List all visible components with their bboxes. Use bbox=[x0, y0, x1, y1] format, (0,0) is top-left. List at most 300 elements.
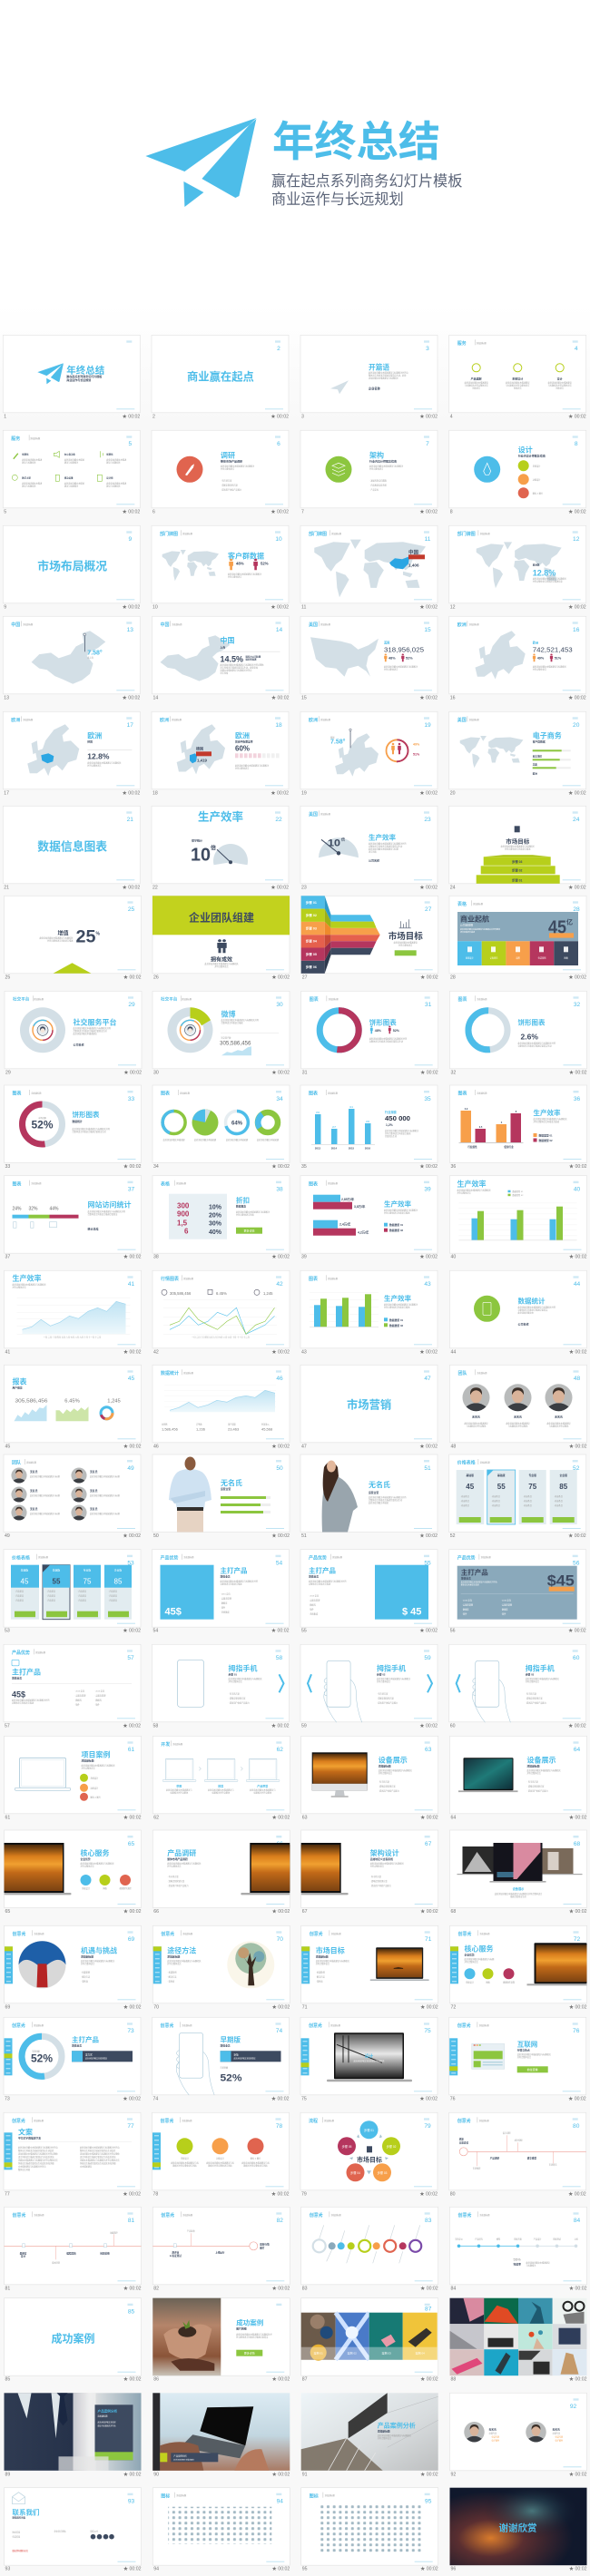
slide 75: bridge laptop: 添加副标题 bbox=[330, 2023, 341, 2027]
slide 91: building stairs photo: ★ 00:02 bbox=[420, 2472, 438, 2477]
slide 74: early version phone: 74 bbox=[276, 2028, 282, 2034]
slide 33: donut 52 percent: 市场份额 bbox=[38, 1116, 47, 1120]
slide 29: social platform wheel bbox=[5, 991, 142, 1075]
slide 94: icon sheet: 94 bbox=[277, 2498, 283, 2504]
slide 3: opening bbox=[300, 335, 438, 419]
slide 80: timeline start: 交流会议 bbox=[459, 2140, 468, 2144]
slide 50: man profile: 50 bbox=[153, 1533, 159, 1539]
slide 60: phone in hand final: ★ 00:02 bbox=[568, 1723, 586, 1729]
slide 84: progress line: 创意秀 bbox=[457, 2212, 472, 2218]
slide 19: europe ring: 德国 bbox=[330, 735, 334, 739]
slide 72: core service laptop: 此处添加详细文本描述建议与标题 bbox=[465, 1957, 495, 1961]
slide 36: grouped bars orange magenta: 36 bbox=[450, 1164, 456, 1170]
slide 53: pricing table blue: ★ 00:02 bbox=[123, 1629, 141, 1634]
slide 28: business launch panel: 电话营销 bbox=[538, 955, 546, 959]
slide 24: stacked steps: 步骤 01 bbox=[512, 877, 523, 882]
slide 36: grouped bars orange magenta: 图表 bbox=[457, 1091, 467, 1097]
slide 70: methods tree: 创意秀 bbox=[161, 1931, 174, 1937]
slide 62: development three laptops: 开发 bbox=[161, 1741, 170, 1748]
slide 18: germany coverage: 1,419 bbox=[197, 758, 208, 762]
slide 69: opportunities and challenges: · 解决方法 bbox=[81, 1974, 91, 1978]
slide 36: grouped bars orange magenta: 此处添加详细文本描述建议与标题相关 bbox=[534, 1117, 567, 1121]
slide 70: methods tree: 添加副标题 bbox=[167, 1954, 180, 1958]
slide 49: six team members: 无名氏 bbox=[90, 1470, 98, 1474]
slide 13: china pin: 北上海 bbox=[87, 655, 94, 659]
slide 22: gauge productivity: 22 bbox=[152, 885, 158, 890]
slide 16: europe statistic: 欧洲 bbox=[457, 622, 467, 628]
slide 10: customer data with world map: ★ 00:02 bbox=[270, 604, 289, 610]
slide 52: pricing table light: 55 bbox=[497, 1483, 506, 1491]
slide 53: pricing table blue bbox=[4, 1550, 141, 1634]
slide 18: germany coverage: 营销平衡覆盖率 bbox=[235, 739, 253, 743]
slide 33: donut 52 percent: 数据统计 bbox=[73, 1120, 83, 1123]
slide 45: report overview: 45 bbox=[128, 1376, 134, 1382]
slide 76: internet window card: 前往查看 bbox=[527, 2067, 538, 2072]
slide 26: team: ★ 00:02 bbox=[271, 975, 290, 980]
slide 4: services three columns: 产品理解 bbox=[471, 376, 482, 380]
slide 57: main product price: · 软件 bbox=[74, 1702, 81, 1706]
slide 57: main product price: 增值业务 bbox=[12, 1676, 22, 1680]
slide 36: grouped bars orange magenta: 添加副标题 bbox=[477, 1091, 487, 1094]
slide 29: social platform wheel: 添加副标题 bbox=[34, 997, 44, 1001]
slide 93: contact us bbox=[4, 2488, 142, 2572]
slide 79: market goal cycle: 添加副标题 bbox=[324, 2119, 335, 2122]
slide 57: main product price: · 软件 bbox=[94, 1702, 101, 1706]
slide 5: services grid: 创意化 bbox=[106, 452, 113, 455]
slide 68: three laptops photos: 68 bbox=[574, 1841, 580, 1847]
slide 79: market goal cycle: 79 bbox=[424, 2123, 431, 2130]
slide 76: internet window card: 并符合整体语言 bbox=[517, 2055, 532, 2059]
slide 13: china pin: 中国 bbox=[11, 622, 20, 628]
slide 56: main product banner: · 2016 定向 bbox=[462, 1599, 472, 1602]
slide 69: opportunities and challenges: 69 bbox=[5, 2004, 10, 2010]
slide 15: USA statistic: 此处添加详细文本描述建议与标题相关 bbox=[384, 664, 418, 668]
slide 42: line chart: ★ 00:02 bbox=[271, 1349, 290, 1355]
slide 72: core service laptop: 核心服务 bbox=[465, 1944, 494, 1953]
slide 59: phone in hand: · 提高用户体验产品能力 bbox=[377, 1700, 398, 1704]
slide 63: iMac device: · 有市场方案 bbox=[379, 1779, 390, 1783]
slide 37: website visit stats: 图表 bbox=[13, 1180, 22, 1187]
slide 37: website visit stats: 37 bbox=[128, 1186, 134, 1192]
slide 40: bar chart with grid: 40 bbox=[450, 1255, 456, 1260]
slide 27: market goals arrow: 并符合整体语言 bbox=[398, 943, 413, 946]
slide 4: services three columns: 风格语言 bbox=[556, 386, 565, 389]
slide 55: main product right square: 此处添加详细文本描述建议与标题相关并符 bbox=[309, 1580, 347, 1583]
slide 23: gauge with text: 23 bbox=[301, 885, 307, 890]
slide 79: market goal cycle: ★ 00:02 bbox=[419, 2191, 438, 2197]
slide 49: six team members: 49 bbox=[127, 1465, 134, 1472]
slide 24: stacked steps bbox=[449, 806, 586, 890]
slide 38: discounts: 更多详情 bbox=[243, 1228, 255, 1232]
slide 73: main product donut: 此处添加详细文本描述建议 bbox=[85, 2056, 107, 2060]
slide 25: 25 percent: 增值 bbox=[58, 929, 69, 936]
slide 56: main product banner bbox=[449, 1550, 586, 1634]
slide 73: main product donut bbox=[4, 2017, 141, 2101]
slide 10: customer data with world map: 并符合整体语言 bbox=[228, 574, 242, 578]
slide 64: laptop teal: · 提高用户体验产品能力 bbox=[526, 1788, 548, 1792]
slide 80: timeline start bbox=[449, 2112, 586, 2197]
slide 10: customer data with world map: 10 bbox=[152, 604, 158, 610]
slide 12: asia statistic: 12.8% bbox=[533, 568, 556, 577]
slide 39: horizontal bars: 39 bbox=[424, 1186, 431, 1192]
slide 45: report overview: 6.45% bbox=[64, 1398, 80, 1404]
slide 70: methods tree: 添加副标题 bbox=[182, 1932, 193, 1935]
slide 18: germany coverage: 18 bbox=[275, 722, 282, 729]
slide 59: phone in hand: 并符合整体语言 bbox=[377, 1680, 391, 1683]
slide 36: grouped bars orange magenta: 行业属性 bbox=[467, 1145, 477, 1149]
slide 6: research: 调研 bbox=[221, 450, 235, 459]
slide 54: main product left square: · 系统集成 bbox=[220, 1611, 230, 1614]
slide 31: donut half: 48% bbox=[375, 1029, 382, 1033]
slide 79: market goal cycle: 市场目标 bbox=[357, 2155, 382, 2163]
slide 69: opportunities and challenges: 添加副标题 bbox=[34, 1932, 44, 1935]
slide 52: pricing table light: · 内容条目 bbox=[554, 1499, 563, 1503]
slide 5: services grid: 建议与标题相关 bbox=[64, 460, 79, 464]
slide 25: 25 percent: 25 bbox=[128, 906, 134, 913]
slide 75: bridge laptop: 创意秀 bbox=[309, 2023, 322, 2029]
slide 8: design: 8 bbox=[575, 441, 578, 447]
slide 7: architecture: · 内容推送运营系统 bbox=[369, 483, 388, 486]
slide 89: suit photo panel: 添加副标题 bbox=[98, 2414, 108, 2417]
slide 49: six team members: 此处添加详细文本描述建议与标题 bbox=[30, 1512, 61, 1515]
slide 38: discounts: 10% bbox=[209, 1205, 222, 1211]
slide 27: market goals arrow: 27 bbox=[302, 975, 308, 980]
slide 87: four color case panels: ★ 00:02 bbox=[420, 2377, 438, 2383]
slide 27: market goals arrow: 步骤 04 bbox=[306, 938, 317, 943]
slide 19: europe ring: 欧洲 bbox=[309, 717, 318, 723]
slide 75: bridge laptop: 此处添加详细文本描述建议与标题相关 bbox=[353, 2059, 385, 2062]
slide 21: section title: ★ 00:02 bbox=[123, 885, 140, 890]
subtitle line 1: 赢在起点系列商务幻灯片模板 bbox=[271, 173, 462, 190]
slide 79: market goal cycle: 流程 bbox=[309, 2118, 318, 2124]
slide 67: architecture design laptop left: 并符合整体语言 bbox=[370, 1864, 385, 1867]
slide 22: gauge productivity: 生产效率 bbox=[198, 809, 243, 823]
slide 72: core service laptop: 创意秀 bbox=[457, 1931, 472, 1937]
slide 35: bar chart years: 2014 bbox=[331, 1147, 338, 1151]
slide 5: services grid: 建议与标题相关 bbox=[22, 484, 36, 487]
slide 59: phone in hand: 此处添加详细文本描述建议与标题相关 bbox=[377, 1677, 411, 1680]
slide 12: asia statistic: 12 bbox=[450, 604, 456, 610]
slide 91: building stairs photo: 添加副标题 bbox=[378, 2429, 390, 2433]
slide 37: website visit stats: 合整体语言风格语言描述尽量简洁 bbox=[87, 1212, 118, 1216]
slide 42: line chart: 1,245 bbox=[263, 1291, 273, 1296]
slide 86: success case hands photo bbox=[152, 2298, 290, 2383]
slide 33: donut 52 percent: ★ 00:02 bbox=[123, 1164, 142, 1170]
slide 1: cover: ★ 00:02 bbox=[123, 414, 140, 419]
slide 88: twelve photo grid: 88 bbox=[450, 2377, 456, 2383]
slide 43: grouped bars blue green: 43 bbox=[301, 1349, 307, 1355]
slide 88: twelve photo grid bbox=[450, 2298, 587, 2383]
slide 41: area chart: ★ 00:02 bbox=[123, 1349, 142, 1355]
slide 56: main product banner: 添加副标题 bbox=[481, 1555, 491, 1559]
slide 48: team portraits: 48 bbox=[574, 1376, 580, 1382]
slide 29: social platform wheel: ★ 00:02 bbox=[123, 1070, 142, 1075]
slide 74: early version phone: 52% bbox=[220, 2072, 242, 2083]
slide 8: design: 图标 & 图片 bbox=[533, 491, 543, 495]
slide 13: china pin bbox=[3, 616, 140, 700]
slide 20: e-commerce bars: 欧洲 bbox=[533, 771, 537, 775]
slide 36: grouped bars orange magenta: 使用行业 bbox=[504, 1145, 514, 1149]
slide 52: pricing table light: 52 bbox=[573, 1465, 580, 1472]
slide 20: e-commerce bars: 美国 bbox=[457, 717, 467, 723]
slide 42: line chart: 42 bbox=[276, 1281, 283, 1288]
slide 71: market goal laptop: 添加副标题 bbox=[331, 1932, 341, 1935]
slide 48: team portraits: 无名氏 bbox=[555, 1414, 563, 1418]
slide 5: services grid: ★ 00:02 bbox=[123, 509, 140, 514]
slide 4: services three columns: 系统设计 bbox=[512, 376, 523, 380]
slide 55: main product right square: · 2016 定向 bbox=[309, 1594, 319, 1598]
slide 36: grouped bars orange magenta: 数据类型 02 bbox=[539, 1139, 553, 1142]
slide 64: laptop teal: 64 bbox=[450, 1815, 456, 1820]
slide 38: discounts: 并符合整体语言风格 bbox=[236, 1213, 254, 1217]
slide 20: e-commerce bars: ★ 00:02 bbox=[568, 790, 586, 796]
slide 53: pricing table blue: · 内容条目 bbox=[77, 1599, 86, 1602]
slide 56: main product banner: 56 bbox=[450, 1629, 456, 1634]
slide 39: horizontal bars bbox=[300, 1176, 438, 1260]
slide 46: data statistics area: 1,586,456 bbox=[162, 1426, 179, 1431]
slide 78: three circles: 78 bbox=[276, 2123, 282, 2130]
slide 14: china statistic: 14 bbox=[152, 695, 158, 700]
slide 4: services three columns: 与标题相关并符合整体语言 bbox=[465, 383, 489, 387]
slide 64: laptop teal: 此处添加详细文本描述建议与标题相关 bbox=[526, 1768, 561, 1772]
slide 89: suit photo panel: 建议与标题相关并符合 bbox=[98, 2424, 116, 2427]
slide 53: pricing table blue: · 内容条目 bbox=[46, 1594, 55, 1598]
slide 8: design: 设计 bbox=[518, 445, 533, 454]
slide 77: copywriting: 77 bbox=[127, 2123, 134, 2130]
slide 41: area chart: 一月 二月 三月 四月 五月 六月 七月 八月 九月 十月 十一月 十二月 bbox=[44, 1335, 101, 1338]
slide 81: timeline middle: 81 bbox=[5, 2286, 10, 2291]
slide 39: horizontal bars: 3,8万/年 bbox=[354, 1204, 366, 1209]
slide 18: germany coverage: 欧洲 bbox=[235, 730, 250, 739]
slide 14: china statistic: ★ 00:02 bbox=[271, 695, 290, 700]
slide 69: opportunities and challenges: · 机遇条例 bbox=[81, 1970, 91, 1974]
slide 84: progress line: 系统测试 bbox=[553, 2237, 562, 2240]
slide 23: gauge with text: 23 bbox=[424, 817, 431, 823]
slide 89: suit photo panel: 产品案例分析 bbox=[98, 2408, 117, 2413]
slide 4: services three columns: 服务 bbox=[457, 340, 467, 347]
slide 40: bar chart with grid: ★ 00:02 bbox=[569, 1255, 587, 1260]
slide 12: asia statistic: ★ 00:02 bbox=[568, 604, 586, 610]
slide 24: stacked steps: 步骤 03 bbox=[512, 859, 523, 864]
slide 87: four color case panels: 案例 04 bbox=[416, 2351, 425, 2356]
slide 24: stacked steps: 并符合整体语言风格语言描述 bbox=[505, 847, 531, 850]
slide 9: section title: 9 bbox=[4, 604, 6, 610]
slide 65: core service laptop: 并符合整体语言 bbox=[80, 1864, 95, 1867]
slide 60: phone in hand final: 拇指手机 bbox=[526, 1663, 555, 1672]
slide 66: product research laptop right: · 清晰定制营销方案 bbox=[167, 1879, 185, 1883]
slide 55: main product right square: 增值业务 bbox=[309, 1575, 319, 1579]
slide 13: china pin: ★ 00:02 bbox=[123, 695, 140, 700]
slide 65: core service laptop: 系统设计 bbox=[82, 1886, 91, 1890]
slide 72: core service laptop: 企业优势 bbox=[465, 1953, 475, 1956]
slide 32: donut 2.6 percent: 合整体语言风格语言描述尽量简洁生动 bbox=[517, 1043, 552, 1047]
slide 4: services three columns: 此处添加详细文本描述建议 bbox=[465, 380, 489, 384]
slide 71: market goal laptop: · 解决方法 bbox=[316, 1974, 326, 1978]
slide 84: progress line: ★ 00:02 bbox=[569, 2286, 587, 2291]
slide 27: market goals arrow: 步骤 02 bbox=[306, 913, 317, 917]
slide 5: services grid: 移动设备 bbox=[64, 475, 74, 479]
slide 11: china highlight on world map: 添加副标题 bbox=[331, 532, 342, 535]
slide 33: donut 52 percent: 此处添加详细文本描述建议与标题相关并符 bbox=[73, 1127, 111, 1131]
slide 73: main product donut: 创意秀 bbox=[12, 2023, 25, 2029]
slide 13: china pin: 13 bbox=[4, 695, 9, 700]
slide 36: grouped bars orange magenta: 8 bbox=[516, 1110, 517, 1113]
slide 44: data statistics: 公司名称 bbox=[517, 1321, 529, 1326]
slide 73: main product donut: 市场份额 bbox=[32, 2049, 41, 2052]
slide 39: horizontal bars: 生产效率 bbox=[384, 1200, 411, 1209]
slide 29: social platform wheel: 社交平台 bbox=[13, 995, 30, 1002]
slide 36: grouped bars orange magenta: 3.5 bbox=[479, 1125, 483, 1129]
slide 56: main product banner: · 云服务管理 bbox=[501, 1603, 513, 1607]
slide 46: data statistics area: 46 bbox=[153, 1444, 159, 1449]
slide 75: bridge laptop: ★ 00:02 bbox=[419, 2096, 438, 2101]
slide 80: timeline start: 产品调研 bbox=[490, 2156, 499, 2160]
slide 95: icon sheet dense: 95 bbox=[425, 2498, 432, 2504]
slide 85: section title: 成功案例 bbox=[51, 2332, 95, 2346]
slide 12: asia statistic: 并符合整体语言风格语言描述尽量 bbox=[533, 579, 563, 583]
slide 27: market goals arrow: 此处添加详细文本描述建议 bbox=[394, 940, 418, 944]
slide 81: timeline middle: 设计 bbox=[21, 2254, 25, 2258]
slide 31: donut half bbox=[301, 991, 438, 1075]
slide 48: team portraits: 此处添加详细文本描述建议 bbox=[506, 1421, 530, 1425]
slide 84: progress line bbox=[450, 2207, 587, 2291]
slide 12: asia statistic: 部门牌图 bbox=[457, 531, 476, 537]
slide 61: project case laptop outline: 此处添加详细文本描述建议与标题相关 bbox=[82, 1763, 115, 1767]
slide 67: architecture design laptop left: 高效地定义过程系统 bbox=[370, 1857, 393, 1861]
slide 94: icon sheet: ★ 00:02 bbox=[272, 2567, 290, 2572]
slide 53: pricing table blue: 55 bbox=[53, 1578, 61, 1586]
slide 39: horizontal bars: 4,2万/年 bbox=[358, 1230, 369, 1235]
slide 62: development three laptops: 标题相关并符合整体 bbox=[253, 1790, 272, 1794]
slide 65: core service laptop: 65 bbox=[5, 1909, 10, 1915]
slide 14: china statistic: 语言风格语言描述尽量简洁生动，此处添加 bbox=[220, 665, 258, 669]
slide 56: main product banner: 增值业务 bbox=[461, 1577, 471, 1581]
slide 30: weibo wheel: 30 bbox=[276, 1002, 283, 1008]
slide 25: 25 percent bbox=[4, 896, 142, 980]
slide 28: business launch panel: 28 bbox=[450, 975, 456, 980]
slide 56: main product banner: 产品优势 bbox=[457, 1554, 476, 1561]
slide 2: section title bbox=[152, 335, 289, 419]
slide 67: architecture design laptop left: 67 bbox=[302, 1909, 308, 1915]
slide 15: USA statistic: 52% bbox=[406, 656, 413, 660]
slide 71: market goal laptop: 市场目标 bbox=[316, 1945, 345, 1954]
slide 66: product research laptop right: 此处添加详细文本描述建议与标题相关 bbox=[167, 1862, 202, 1866]
slide 85: section title: ★ 00:02 bbox=[123, 2377, 142, 2383]
slide 84: progress line: 完成率 bbox=[514, 2262, 521, 2266]
slide 49: six team members: 无名氏 bbox=[30, 1470, 38, 1474]
slide 6: research: 并符合整体语言 bbox=[221, 466, 235, 470]
slide 52: pricing table light: · 内容条目 bbox=[460, 1503, 469, 1507]
slide 37: website visit stats bbox=[4, 1176, 142, 1260]
slide 15: USA statistic: 318,956,025 bbox=[384, 645, 424, 653]
slide 35: bar chart years: 2013 bbox=[315, 1147, 321, 1151]
slide 32: donut 2.6 percent: 图表 bbox=[457, 996, 467, 1003]
slide 23: gauge with text: 公司名称 bbox=[369, 857, 379, 862]
slide 63: iMac device: 添加副标题 bbox=[379, 1764, 391, 1768]
slide 60: phone in hand final: · 提高用户体验产品能力 bbox=[526, 1700, 546, 1704]
slide 42: line chart: 行情图表 bbox=[161, 1276, 179, 1282]
slide 78: three circles: 此处添加详细文本描述建议与标 bbox=[206, 2160, 235, 2164]
slide 41: area chart: 生产效率 bbox=[13, 1273, 42, 1282]
slide 84: progress line: 产品设计 bbox=[534, 2237, 542, 2240]
slide 53: pricing table blue: 添加副标题 bbox=[38, 1555, 49, 1559]
slide 16: europe statistic: ★ 00:02 bbox=[568, 695, 586, 700]
slide 21: section title: 数据信息图表 bbox=[37, 839, 107, 853]
slide 39: horizontal bars: 2,85万/年 bbox=[341, 1197, 355, 1201]
slide 8: design: 功能设计 bbox=[533, 477, 541, 481]
slide 40: bar chart with grid: 40 bbox=[574, 1186, 580, 1192]
slide 76: internet window card: 行情与热点 bbox=[517, 2048, 530, 2052]
slide 75: bridge laptop: 75 bbox=[301, 2096, 307, 2101]
slide 95: icon sheet dense bbox=[301, 2488, 438, 2572]
slide 55: main product right square: 合整体语言风格语言描述 bbox=[309, 1582, 331, 1586]
slide 50: man profile: 50 bbox=[276, 1465, 283, 1472]
slide 57: main product price: 此处添加详细文本描述建议与标题相关并符 bbox=[12, 1698, 50, 1701]
slide 14: china statistic bbox=[152, 616, 290, 700]
slide 62: development three laptops: 此处添加详细文本描述建议与 bbox=[250, 1788, 276, 1791]
slide 8: design: 行业内设计师服务指南 bbox=[518, 453, 546, 457]
slide 82: timeline end: 82 bbox=[153, 2286, 159, 2291]
slide 45: report overview: 45 bbox=[5, 1444, 10, 1449]
slide 11: china highlight on world map: 11 bbox=[301, 604, 306, 610]
slide 52: pricing table light: 价格表格 bbox=[457, 1460, 476, 1466]
slide 77: copywriting: ★ 00:02 bbox=[123, 2191, 141, 2197]
slide 8: design bbox=[449, 430, 586, 514]
slide 3: opening: 此处添加详细文本描述建议与标题相关并符合 bbox=[369, 370, 409, 374]
slide 77: copywriting: 语言风格语言描述尽量简洁生动此处添加 bbox=[80, 2155, 115, 2159]
slide 59: phone in hand bbox=[300, 1644, 438, 1729]
slide 40: bar chart with grid: 生产效率 bbox=[457, 1180, 487, 1189]
slide 90: office laptop photo: 90 bbox=[153, 2472, 159, 2477]
slide 36: grouped bars orange magenta: 生产效率 bbox=[534, 1108, 561, 1117]
slide 31: donut half: 31 bbox=[425, 1002, 432, 1008]
slide 96: thank you nebula bbox=[450, 2488, 587, 2572]
slide 27: market goals arrow bbox=[301, 896, 438, 980]
slide 59: phone in hand: 步骤 02 bbox=[377, 1672, 386, 1676]
slide 53: pricing table blue: · 内容条目 bbox=[15, 1594, 24, 1598]
slide 11: china highlight on world map bbox=[300, 525, 438, 610]
slide 5: services grid: 添加副标题 bbox=[30, 436, 41, 440]
slide 70: methods tree: 70 bbox=[153, 2004, 159, 2010]
slide 51: woman profile: 无名氏 bbox=[369, 1480, 390, 1489]
slide 62: development three laptops: 标题相关并符合整体 bbox=[170, 1790, 189, 1794]
slide 38: discounts: 6 bbox=[184, 1228, 189, 1236]
slide 66: product research laptop right: 整体市场产品调研 bbox=[167, 1857, 188, 1861]
slide 61: project case laptop outline: 系统设计 bbox=[91, 1776, 99, 1779]
slide 77: copywriting: 语言风格语言描述尽量简洁生动此处添加 bbox=[18, 2155, 54, 2159]
slide 16: europe statistic: 欧洲 bbox=[533, 640, 538, 644]
slide 28: business launch panel: 此处添加详细文本描述建议与标题相关并符合整体 bbox=[460, 927, 500, 931]
slide 81: timeline middle: 校园范畴 bbox=[100, 2251, 110, 2255]
slide 94: icon sheet: 94 bbox=[153, 2567, 159, 2572]
slide 16: europe statistic: 49% bbox=[537, 656, 545, 660]
slide 58: phone outline: ★ 00:02 bbox=[271, 1723, 290, 1729]
slide 8: design: ★ 00:02 bbox=[568, 509, 586, 514]
slide 76: internet window card: 创意秀 bbox=[457, 2023, 471, 2029]
slide 43: grouped bars blue green: 生产效率 bbox=[384, 1293, 411, 1302]
slide 91: building stairs photo: 产品案例分析 bbox=[378, 2421, 416, 2429]
slide 62: development three laptops bbox=[152, 1736, 290, 1820]
slide 5: services grid: 建议与标题相关 bbox=[106, 484, 121, 487]
slide 57: main product price bbox=[4, 1644, 141, 1729]
slide 30: weibo wheel: 添加副标题 bbox=[182, 997, 192, 1001]
slide 38: discounts: ★ 00:02 bbox=[271, 1255, 290, 1260]
slide 84: progress line: 上线 bbox=[574, 2237, 578, 2240]
slide 79: market goal cycle: 步骤 01 bbox=[364, 2128, 374, 2132]
slide 65: core service laptop: 核心服务 bbox=[80, 1848, 109, 1857]
slide 52: pricing table light bbox=[449, 1455, 586, 1539]
slide 19: europe ring: 51% bbox=[413, 752, 420, 756]
